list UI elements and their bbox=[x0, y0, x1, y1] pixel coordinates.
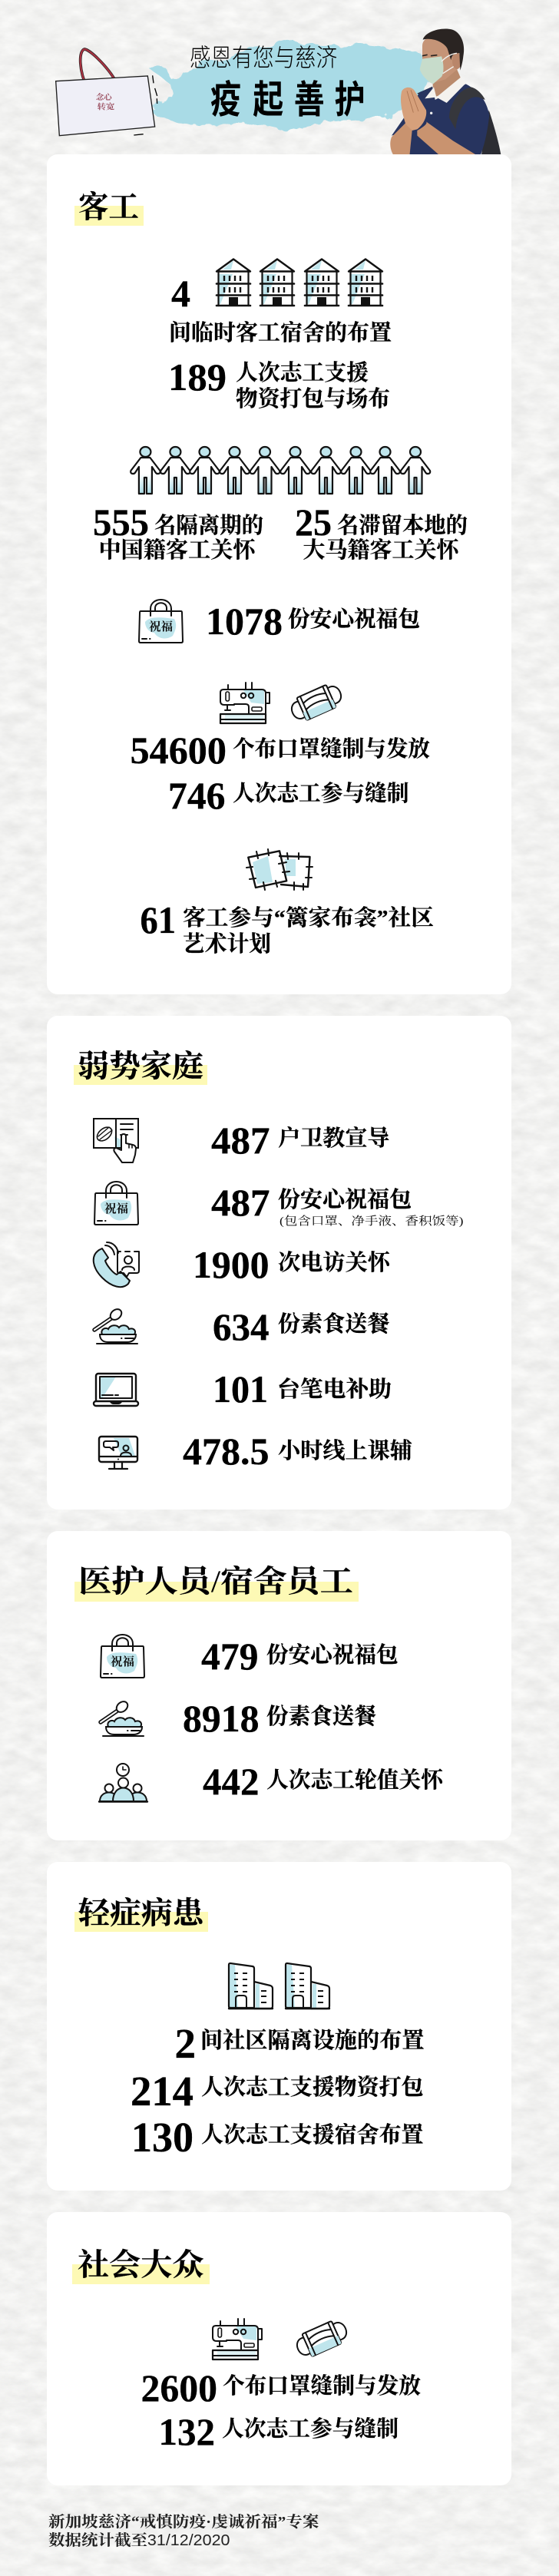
heading: 弱势家庭: 弱势家庭 bbox=[78, 1049, 203, 1083]
panel: 社会大众 bbox=[47, 2212, 511, 2485]
stat: 746 volunteers: 人次志工参与缝制 bbox=[233, 781, 408, 806]
header brush stroke bbox=[147, 41, 435, 130]
stat: 442 volunteers: 人次志工轮值关怀 bbox=[266, 1767, 445, 1793]
stat: 479 bags: 份安心祝福包 bbox=[266, 1642, 398, 1668]
stat: 2 facilities: 间社区隔离设施的布置 bbox=[200, 2027, 424, 2053]
icon: blessing bag: 祝福 bbox=[111, 1655, 134, 1668]
stat: 214 volunteers: 人次志工支援物资打包 bbox=[201, 2075, 424, 2100]
stat: 2 facilities: 2 bbox=[175, 2020, 196, 2067]
stat: 101 laptops: 101 bbox=[213, 1367, 268, 1410]
illustration: tote bag bbox=[56, 49, 157, 136]
stat: 61 workers art project: 客工参与“篱家布衾”社区 bbox=[183, 905, 434, 931]
stat: 2600 masks: 2600 bbox=[141, 2366, 217, 2409]
stat: 4 dormitories bbox=[169, 260, 392, 346]
illustration: tote bag: 转宽 bbox=[98, 101, 114, 111]
stat: 555 Chinese workers: 中国籍客工关怀 bbox=[98, 537, 256, 563]
stat: 1900 calls: 1900 bbox=[193, 1243, 269, 1286]
icon: face mask bbox=[288, 681, 345, 724]
icon: blessing bag bbox=[101, 1635, 144, 1678]
stat: 555 Chinese workers: 555 bbox=[93, 501, 149, 544]
panel: 客工 bbox=[47, 154, 511, 994]
stat: 132 volunteers bbox=[158, 2410, 399, 2453]
heading: 客工: 客工 bbox=[78, 190, 139, 224]
stat: 555 Chinese workers bbox=[93, 501, 263, 563]
icon: blessing bag bbox=[139, 600, 183, 643]
footer note: 数据统计截至 31/12/2020 bbox=[48, 2531, 230, 2549]
stat: 8918 meals: 份素食送餐 bbox=[266, 1704, 376, 1729]
stat: 214 volunteers bbox=[131, 2068, 424, 2115]
panel: 医护人员/宿舍员工 bbox=[47, 1531, 511, 1840]
heading: 医护人员/宿舍员工: 医护人员 /宿舍员工 bbox=[78, 1564, 353, 1599]
stat: 25 Malaysian workers: 名滞留本地的 bbox=[337, 513, 468, 538]
footer note: 新加坡慈济“戒慎防疫·虔诚祈福”专案 bbox=[48, 2512, 319, 2531]
stat: 1900 calls bbox=[193, 1243, 392, 1286]
stat: 479 bags bbox=[201, 1635, 398, 1678]
icon: blessing bag: 祝福 bbox=[104, 1202, 128, 1215]
stat: 442 volunteers: 442 bbox=[203, 1760, 260, 1803]
icon: laptop bbox=[94, 1374, 138, 1406]
header bbox=[56, 28, 501, 156]
stat: 555 Chinese workers: 名隔离期的 bbox=[154, 512, 263, 538]
icon: blessing bag: 祝福 bbox=[149, 620, 173, 633]
icon: isolation buildings bbox=[229, 1963, 273, 2009]
stat: 1900 calls: 次电访关怀 bbox=[278, 1250, 392, 1275]
icon: online tutoring monitor bbox=[99, 1437, 137, 1469]
stat: 8918 meals bbox=[183, 1697, 376, 1740]
stat: 442 volunteers bbox=[203, 1760, 445, 1803]
stat: 2600 masks bbox=[141, 2366, 421, 2409]
stat: 214 volunteers: 214 bbox=[131, 2068, 194, 2115]
stat: 2 facilities bbox=[175, 2020, 424, 2067]
stat: 634 meals bbox=[213, 1305, 390, 1348]
stat: 634 meals: 634 bbox=[213, 1305, 269, 1348]
stat: 1078 bags: 份安心祝福包 bbox=[288, 607, 420, 632]
stat: 189 volunteers: 189 bbox=[168, 355, 227, 398]
stat: 25 Malaysian workers: 大马籍客工关怀 bbox=[303, 537, 460, 563]
stat: 746 volunteers bbox=[168, 774, 408, 817]
photo: volunteer praying bbox=[390, 28, 501, 156]
stat: 634 meals: 份素食送餐 bbox=[278, 1311, 390, 1337]
stat: 189 volunteers: 人次志工支援 bbox=[236, 360, 369, 385]
stat: 101 laptops: 台笔电补助 bbox=[277, 1377, 392, 1402]
stat: 487 bags: (包含口罩、净手液、香积饭等) bbox=[280, 1214, 464, 1228]
icon: leaflet with hand bbox=[94, 1119, 138, 1162]
stat: 4 dormitories: 4 bbox=[171, 272, 190, 315]
stat: 8918 meals: 8918 bbox=[183, 1697, 260, 1740]
footer note bbox=[48, 2512, 319, 2549]
panel: 弱势家庭 bbox=[47, 1016, 511, 1510]
stat: 487 bags bbox=[211, 1181, 464, 1228]
stat: 479 bags: 479 bbox=[201, 1635, 258, 1678]
icon: sewing machine bbox=[220, 683, 270, 723]
icon: isolation buildings bbox=[286, 1963, 329, 2009]
icon: row of people bbox=[131, 447, 430, 494]
stat: 478.5 hours: 小时线上课辅 bbox=[278, 1438, 412, 1463]
icon: volunteers on duty bbox=[99, 1764, 147, 1801]
stat: 54600 masks: 个布口罩缝制与发放 bbox=[233, 736, 430, 762]
stat: 487 households: 487 bbox=[211, 1119, 270, 1162]
stat: 189 volunteers bbox=[168, 355, 390, 412]
stat: 130 volunteers bbox=[131, 2114, 424, 2161]
title: 疫起善护 bbox=[210, 78, 366, 121]
stat: 61 workers art project: 艺术计划 bbox=[183, 931, 271, 957]
icon: fabric patches bbox=[246, 849, 313, 890]
stat: 478.5 hours bbox=[183, 1430, 412, 1473]
stat: 61 workers art project: 61 bbox=[140, 898, 176, 941]
stat: 478.5 hours: 478.5 bbox=[183, 1430, 269, 1473]
stat: 132 volunteers: 人次志工参与缝制 bbox=[222, 2416, 399, 2442]
stat: 54600 masks bbox=[131, 729, 430, 772]
stat: 487 households: 户卫教宣导 bbox=[278, 1126, 390, 1151]
stat: 487 households bbox=[211, 1119, 390, 1162]
icon: face mask bbox=[293, 2317, 350, 2360]
stat: 1078 bags: 1078 bbox=[206, 600, 283, 643]
stat: 487 bags: 487 bbox=[211, 1181, 270, 1224]
stat: 101 laptops bbox=[213, 1367, 392, 1410]
heading: 社会大众: 社会大众 bbox=[78, 2247, 204, 2282]
illustration: tote bag: 念心 bbox=[96, 92, 114, 102]
stat: 25 Malaysian workers: 25 bbox=[295, 501, 332, 544]
stat: 25 Malaysian workers bbox=[295, 501, 468, 563]
stat: 1078 bags bbox=[206, 600, 420, 643]
panel: 轻症病患 bbox=[47, 1862, 511, 2191]
stat: 130 volunteers: 人次志工支援宿舍布置 bbox=[201, 2122, 424, 2148]
icon: vegetarian meal bbox=[101, 1699, 144, 1736]
stat: 2600 masks: 个布口罩缝制与发放 bbox=[223, 2373, 421, 2399]
icon: phone call bbox=[94, 1242, 139, 1287]
stat: 132 volunteers: 132 bbox=[158, 2410, 215, 2453]
stat: 54600 masks: 54600 bbox=[131, 729, 227, 772]
stat: 4 dormitories: 间临时客工宿舍的布置 bbox=[169, 320, 392, 346]
stat: 130 volunteers: 130 bbox=[131, 2114, 194, 2161]
icon: sewing machine bbox=[213, 2319, 262, 2359]
stat: 746 volunteers: 746 bbox=[168, 774, 226, 817]
stat: 61 workers art project bbox=[140, 898, 434, 957]
heading: 轻症病患: 轻症病患 bbox=[78, 1896, 207, 1930]
stat: 189 volunteers: 物资打包与场布 bbox=[236, 386, 390, 412]
icon: blessing bag bbox=[94, 1182, 138, 1225]
stat: 487 bags: 份安心祝福包 bbox=[278, 1187, 412, 1212]
handwritten line: 感恩有您与慈济 bbox=[190, 45, 337, 71]
icon: vegetarian meal bbox=[94, 1307, 137, 1344]
